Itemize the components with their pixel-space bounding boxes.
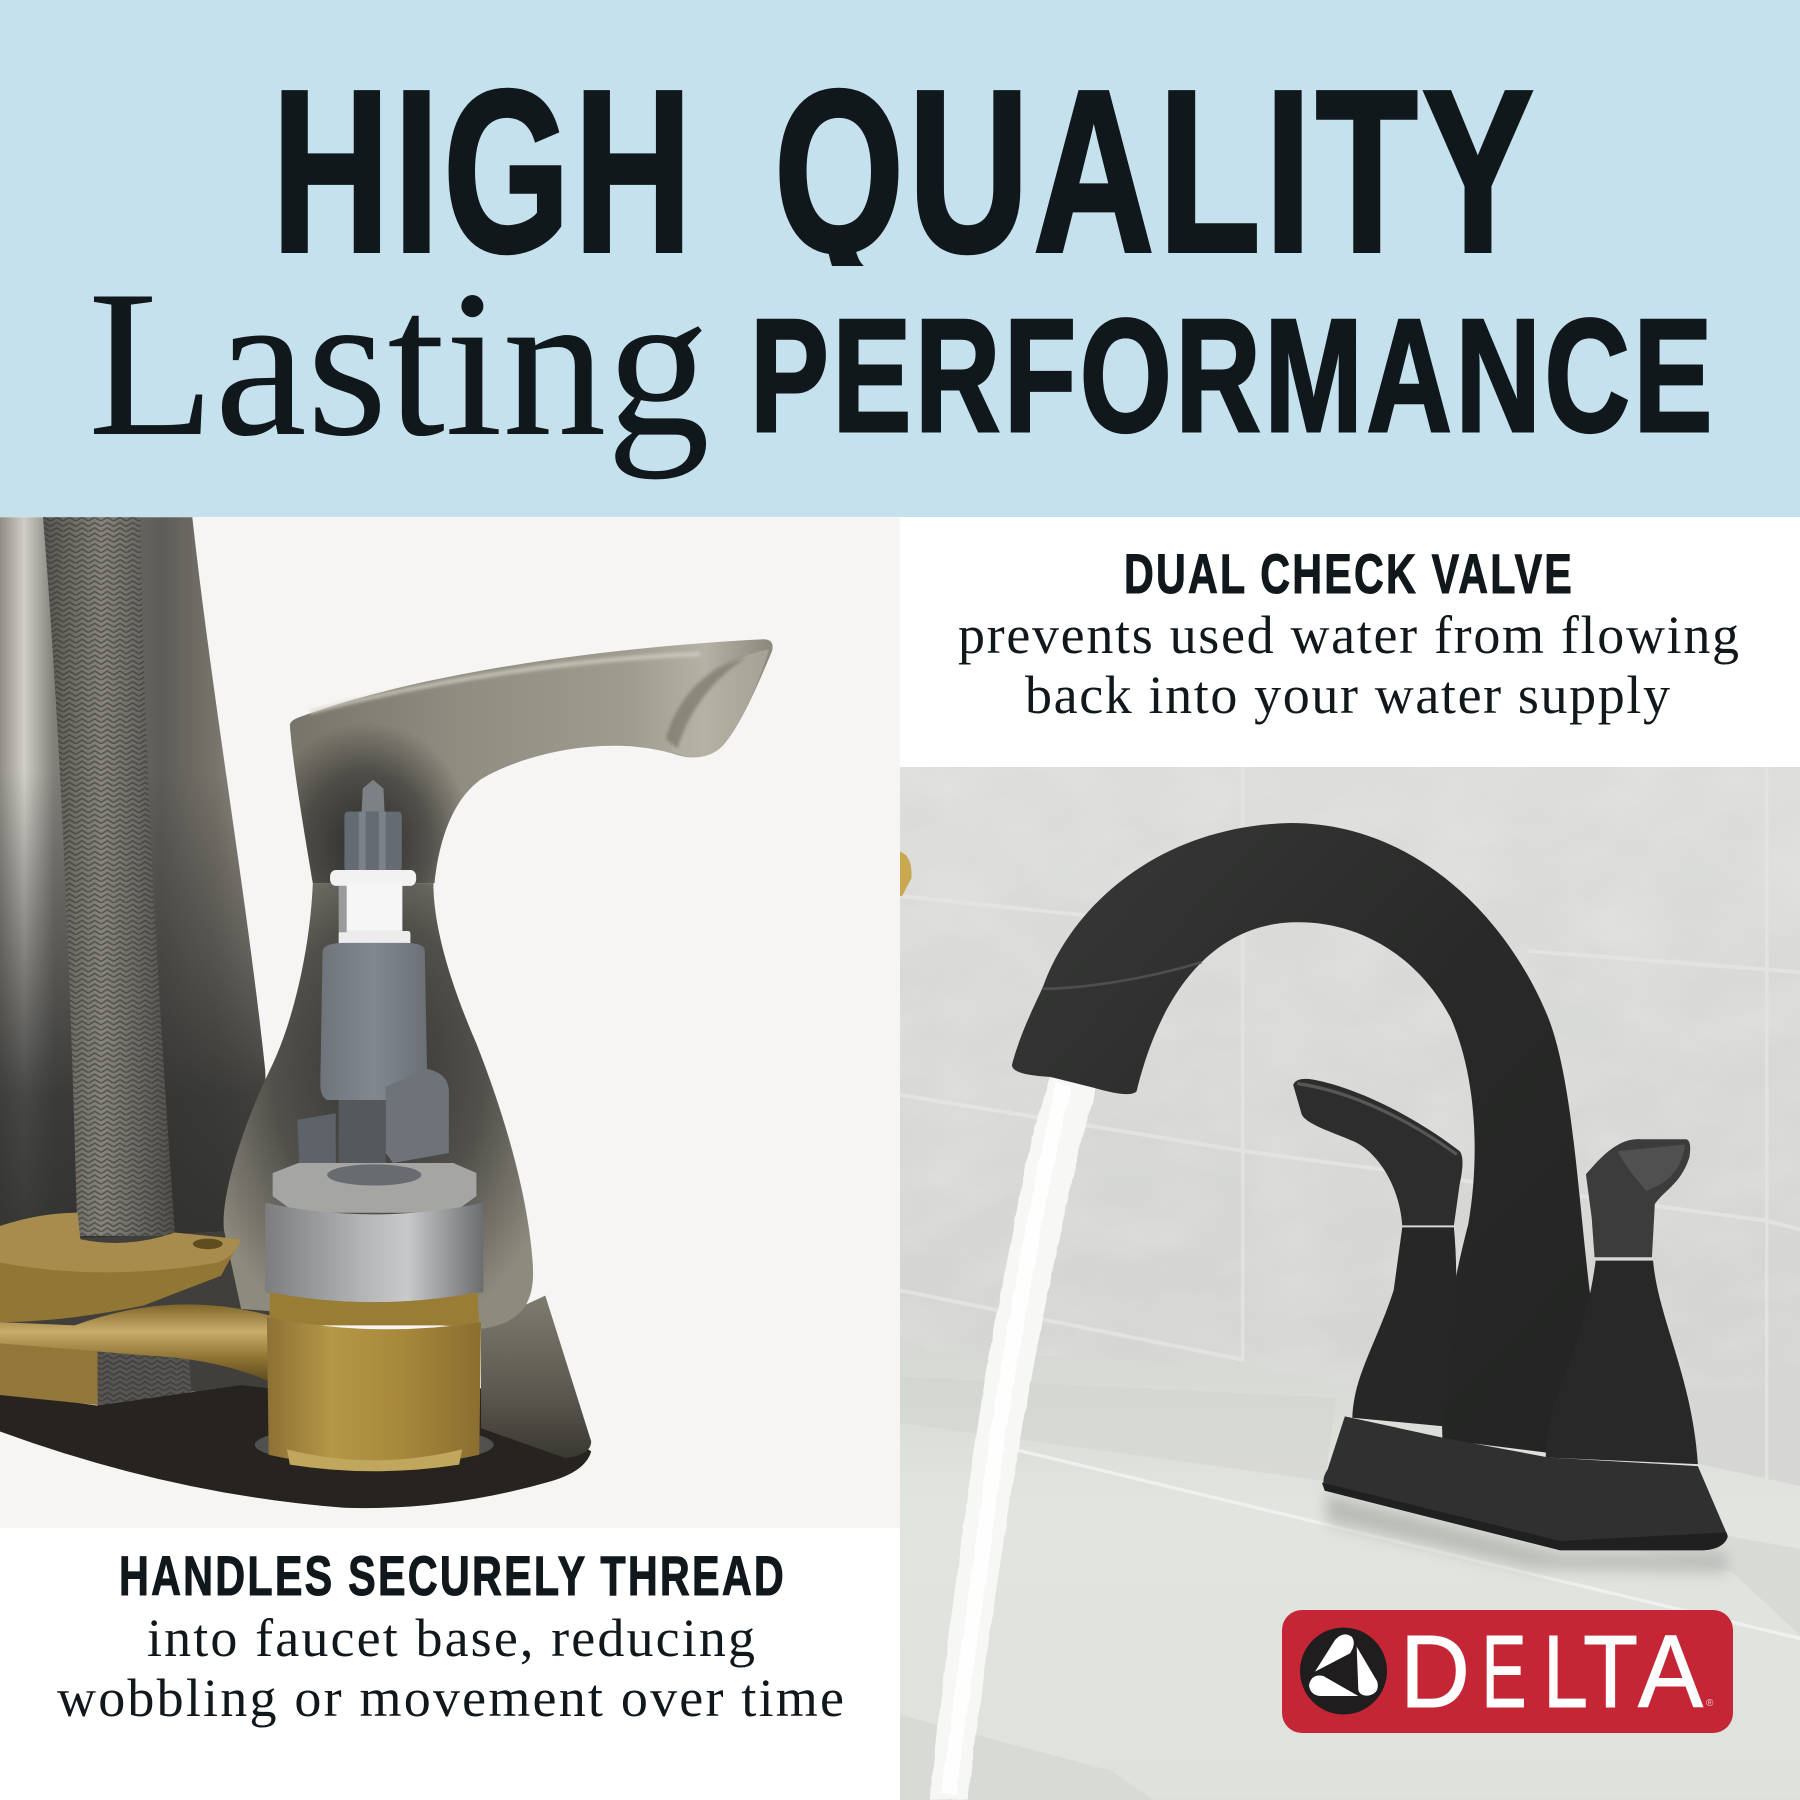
wordmark: DELTA: L bbox=[1543, 1614, 1588, 1729]
left clip bbox=[297, 1113, 336, 1163]
threaded pin bbox=[362, 780, 385, 812]
wordmark: DELTA: D bbox=[1400, 1614, 1470, 1729]
lever handle bbox=[290, 639, 773, 883]
caption body line 2: back into your water supply bbox=[1025, 665, 1670, 725]
tall spout body behind bbox=[0, 517, 270, 1243]
right clip bbox=[386, 1069, 449, 1163]
black mounting plate bbox=[0, 1385, 591, 1508]
title line 1: HIGH QUALITY: QUALITY bbox=[774, 42, 1538, 300]
vanity countertop bbox=[900, 1441, 1800, 1798]
octagonal nut bbox=[273, 1163, 476, 1213]
faucet deck plate bbox=[1322, 1416, 1728, 1550]
panel: handles caption bbox=[0, 1528, 900, 1800]
caption heading: DUAL CHECK VALVE bbox=[1124, 542, 1574, 605]
brass fixture at wall edge bbox=[900, 851, 912, 896]
wordmark: DELTA: T bbox=[1583, 1614, 1638, 1729]
faucet shadow bbox=[1325, 1493, 1727, 1572]
water stream bbox=[930, 1078, 1096, 1800]
valve cartridge bbox=[265, 780, 483, 1302]
logo: Delta badge bbox=[1282, 1610, 1733, 1733]
title line 1: HIGH QUALITY bbox=[282, 88, 1534, 266]
faucet right handle bbox=[1546, 1139, 1698, 1464]
caption body line 1: into faucet base, reducing bbox=[147, 1608, 755, 1668]
caption body line 1: prevents used water from flowing bbox=[958, 605, 1739, 665]
panel: header banner bbox=[0, 0, 1800, 517]
wordmark: DELTA bbox=[1400, 1614, 1703, 1729]
brass water arm bbox=[0, 1304, 270, 1382]
panel: dual check valve caption bbox=[900, 517, 1800, 767]
lower shaft bbox=[339, 1100, 386, 1170]
white collar bbox=[330, 870, 416, 944]
translucent handle body bbox=[224, 883, 533, 1329]
registered mark: ® bbox=[1706, 1698, 1714, 1709]
brass valve body bbox=[267, 1292, 481, 1471]
grey cartridge body bbox=[320, 943, 427, 1100]
wordmark: DELTA: A bbox=[1638, 1614, 1703, 1729]
steel ring bbox=[265, 1203, 483, 1302]
tile wall grout bbox=[900, 895, 1800, 1479]
wordmark: DELTA: E bbox=[1482, 1614, 1526, 1729]
caption heading: HANDLES SECURELY THREAD bbox=[119, 1544, 786, 1607]
caption body line 2: wobbling or movement over time bbox=[57, 1668, 844, 1728]
title line 1: HIGH QUALITY: HIGH bbox=[272, 42, 696, 300]
braided supply hose bbox=[43, 517, 192, 1407]
title line 2: Lasting: Lasting bbox=[88, 248, 710, 480]
brass mounting disc bbox=[0, 1213, 241, 1405]
faucet spout bbox=[1012, 823, 1595, 1453]
translucent faucet base bbox=[481, 1296, 591, 1458]
panel: cutaway faucet illustration bbox=[0, 517, 900, 1528]
panel: black faucet photo bbox=[900, 767, 1800, 1800]
icon: Delta triangle mark bbox=[1300, 1628, 1387, 1714]
splined stem bbox=[344, 812, 402, 871]
faucet left handle bbox=[1293, 1079, 1463, 1426]
dark backdrop behind brass bbox=[0, 1223, 270, 1392]
